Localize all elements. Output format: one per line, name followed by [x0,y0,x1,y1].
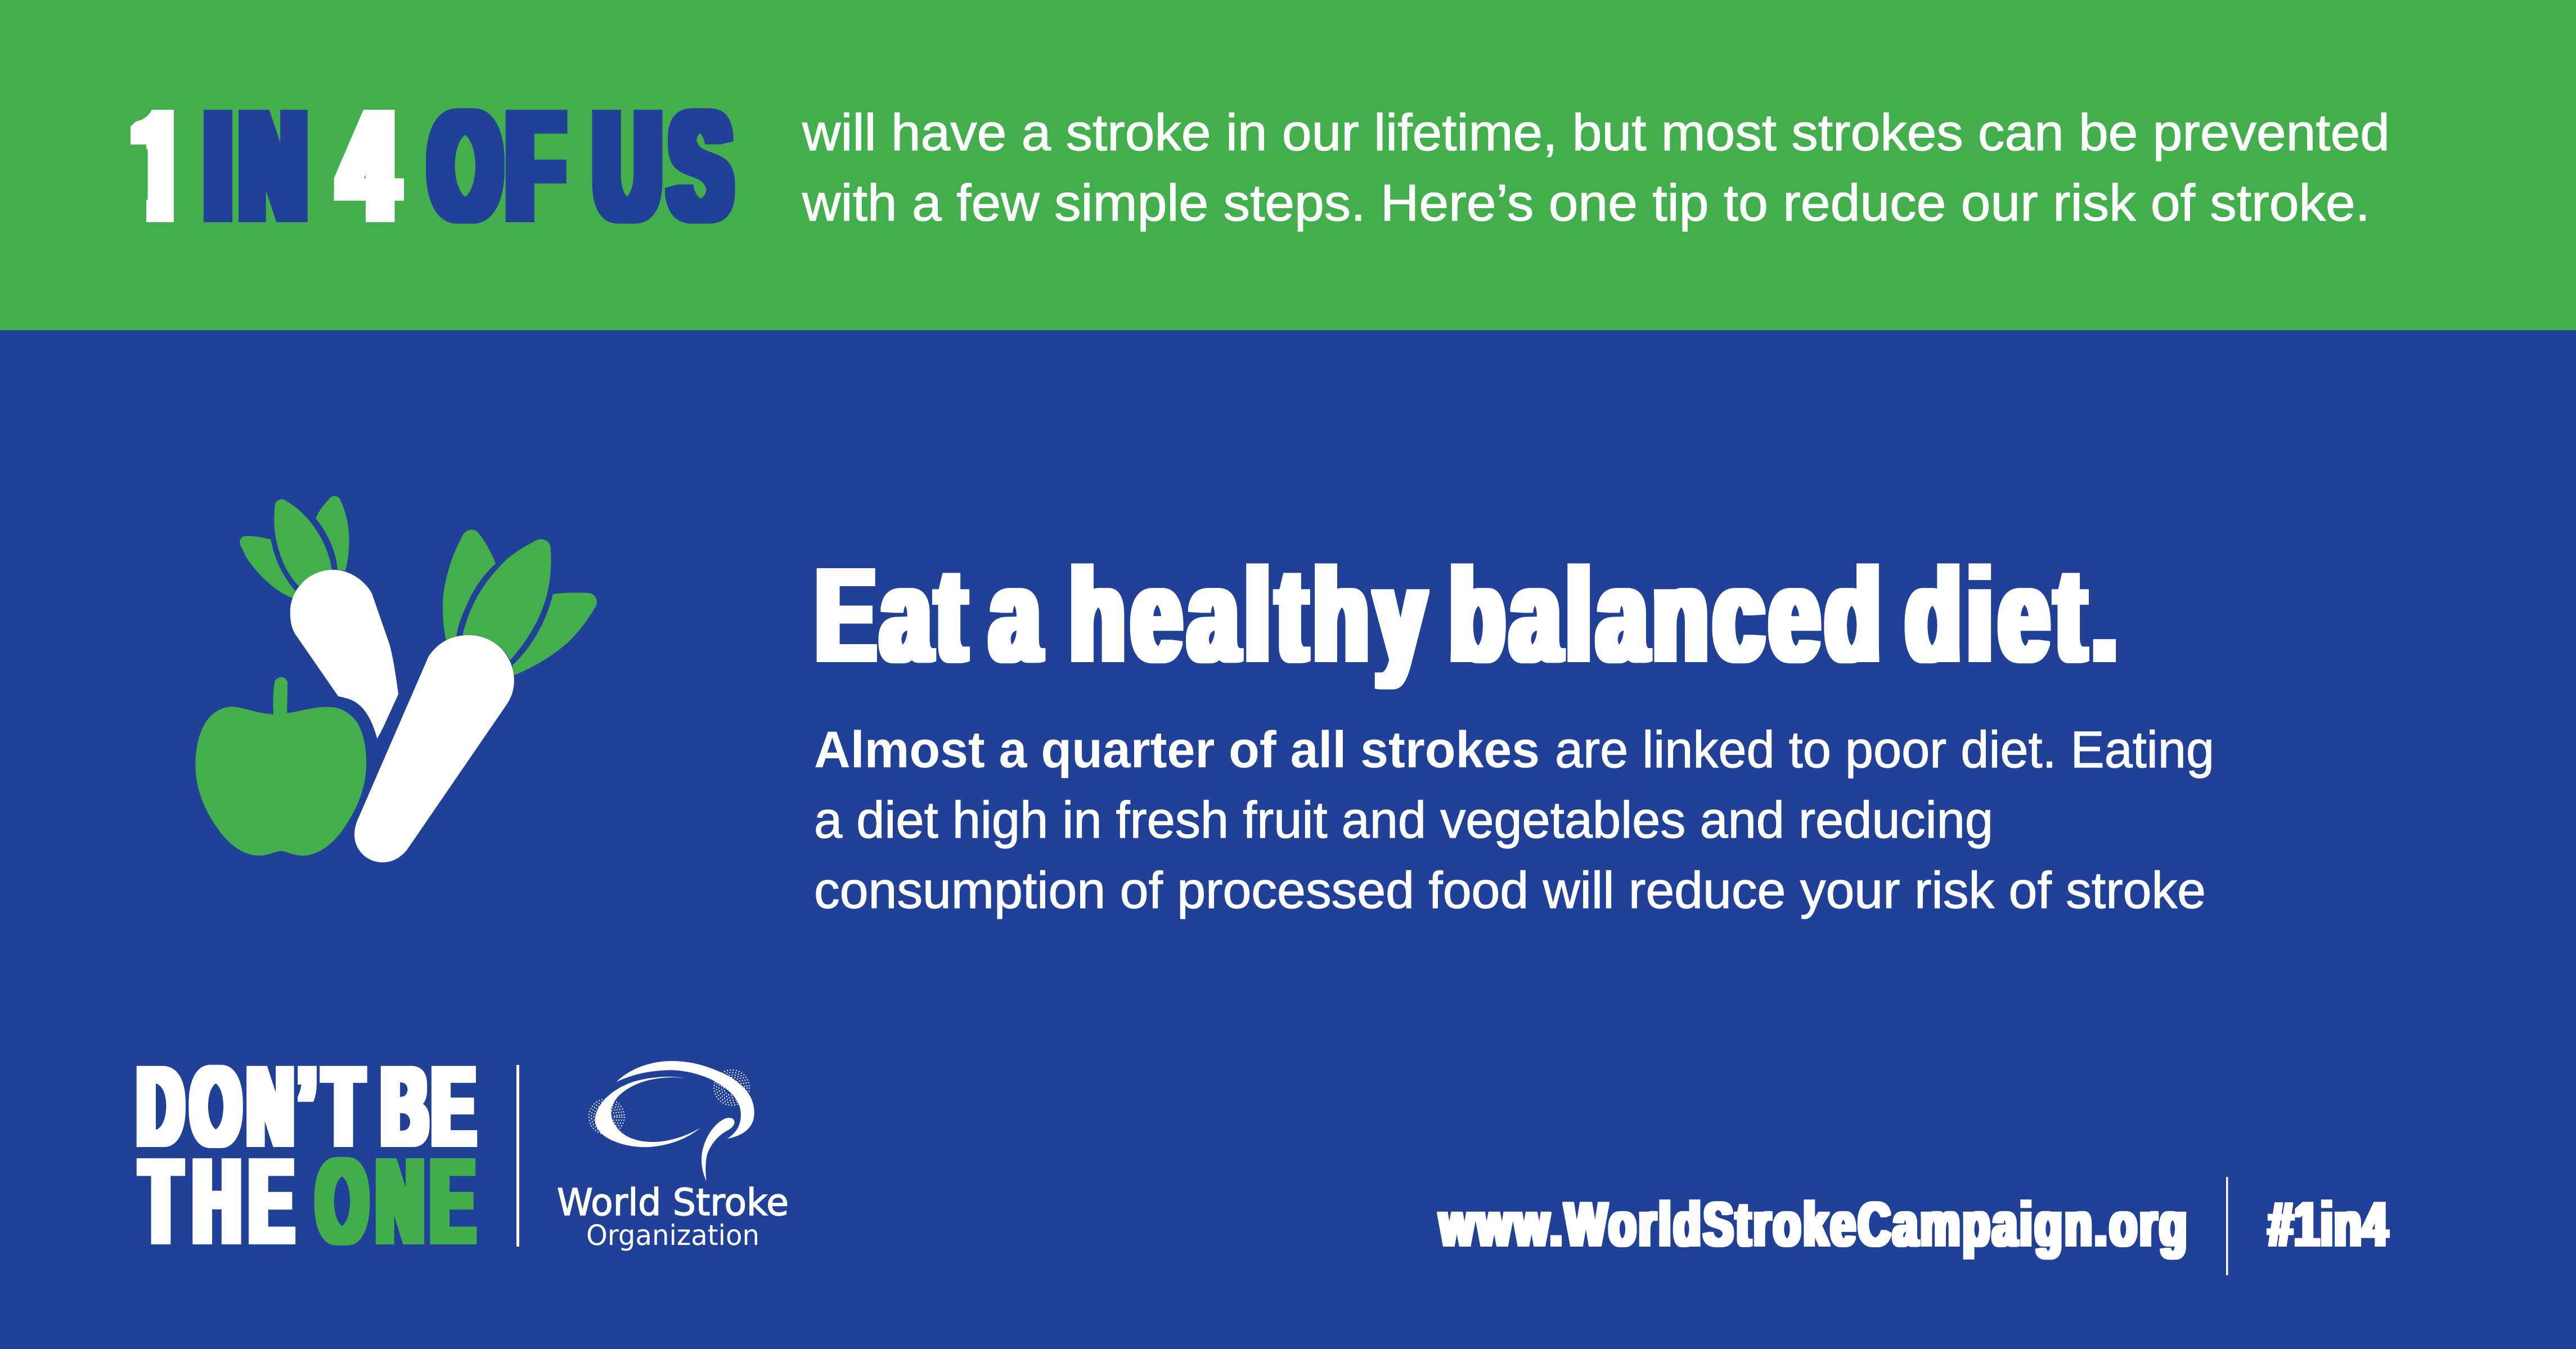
heading: eat a healthy balanced diet: a [990,541,1041,689]
campaign logo: don't be the one [137,1044,475,1267]
intro text block: will have a stroke in our lifetime, but most strokes can be prevented [802,104,2390,161]
body text block: are linked to poor diet. Eating [1555,721,2214,779]
icon: carrot [354,635,514,862]
heading: eat a healthy balanced diet: diet. [1906,541,2117,689]
divider: logos [516,1065,519,1247]
heading: eat a healthy balanced diet [816,541,2117,689]
icon: radish leaves [240,496,349,598]
icon: apple, radish and carrot [195,496,597,862]
heading: 1 in 4 of us: 4 [340,80,397,251]
body text block [814,721,2214,919]
heading: eat a healthy balanced diet: healthy [1070,541,1425,689]
campaign logo: don't be the one: DON’T [137,1044,363,1168]
header band: green [0,0,2576,330]
heading: eat a healthy balanced diet: balanced [1450,541,1880,689]
body text block: a diet high in fresh fruit and vegetables and reducing [814,792,1993,849]
icon: apple [195,677,366,856]
logo text: world stroke organization: World Stroke [557,1181,789,1224]
campaign logo: don't be the one: ONE [317,1135,474,1267]
divider: footer [2226,1177,2228,1275]
heading: 1 in 4 of us [131,108,735,224]
heading: 1 in 4 of us: US [595,80,731,251]
body text block: Almost a quarter of all strokes [814,721,1540,779]
icon: carrot leaves [443,530,597,675]
website and hashtag: #1in4 [2268,1190,2388,1259]
heading: eat a healthy balanced diet: Eat [816,541,966,689]
icon: radish [290,570,398,739]
logo text: world stroke organization: Organization [586,1219,759,1252]
body text block: consumption of processed food will reduce your risk of stroke [814,862,2206,919]
logo text: world stroke organization [557,1181,789,1252]
heading: 1 in 4 of us: 1 [131,80,190,251]
website and hashtag: www.WorldStrokeCampaign.org [1439,1190,2187,1259]
heading: 1 in 4 of us: IN [205,80,306,251]
heading: 1 in 4 of us: OF [430,80,563,251]
logo: world stroke organization symbol [589,1061,754,1181]
intro text block [802,104,2390,232]
intro text block: with a few simple steps. Here’s one tip to reduce our risk of stroke. [802,174,2370,232]
campaign logo: don't be the one: BE [381,1044,475,1168]
campaign logo: don't be the one: THE [141,1135,293,1267]
